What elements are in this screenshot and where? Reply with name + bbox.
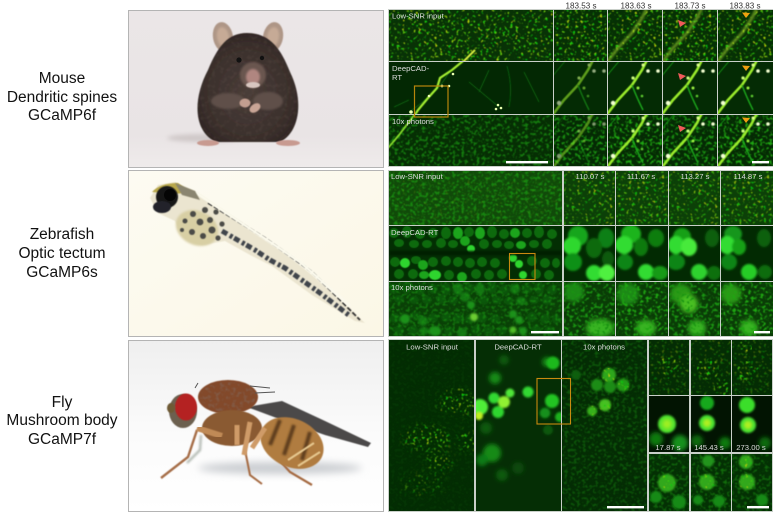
panel labels: mouse: DeepCAD-	[392, 64, 430, 73]
image: zebrafish 10x overview	[389, 282, 562, 336]
row label: zebrafish	[18, 226, 106, 281]
row label: fly	[6, 394, 118, 448]
panel labels: mouse: RT	[392, 73, 402, 82]
panel labels: fly	[406, 342, 625, 352]
arrowheads: red, spine	[678, 20, 686, 132]
panel group: mouse dendritic spine imaging	[388, 2, 773, 170]
timestamps: fly: 273.00 s	[736, 443, 766, 452]
orange selection box	[537, 378, 570, 424]
row label: mouse	[7, 70, 117, 124]
timestamps: mouse: 183.83 s	[729, 2, 761, 10]
panel labels: zebrafish: Low-SNR input	[391, 172, 444, 181]
arrowheads: orange, spine	[742, 12, 750, 123]
row label: mouse: Dendritic spines	[7, 89, 117, 106]
scale bars: mouse	[506, 161, 769, 163]
panel labels: fly: 10x photons	[583, 342, 625, 352]
row label: zebrafish: Optic tectum	[18, 245, 106, 262]
panel labels: fly: DeepCAD-RT	[494, 342, 542, 352]
panel labels: mouse: Low-SNR input	[392, 12, 445, 20]
timestamps: mouse: 183.63 s	[620, 2, 652, 10]
small panels: low-SNR	[649, 340, 772, 395]
photo: zebrafish	[128, 170, 384, 336]
image: mouse low-SNR overview	[389, 10, 553, 61]
timestamps: mouse: 183.53 s	[565, 2, 597, 10]
small panels: DeepCAD	[649, 396, 772, 452]
small panels: 10x photons time series	[564, 282, 773, 337]
timestamps: fly: 145.43 s	[694, 443, 724, 452]
timestamps: zebrafish	[576, 172, 763, 181]
row label: fly: GCaMP7f	[28, 431, 97, 448]
timestamps: zebrafish: 110.07 s	[576, 172, 605, 181]
timestamps: mouse: 183.73 s	[674, 2, 706, 10]
panel labels: mouse	[392, 12, 445, 126]
image: zebrafish DeepCAD overview	[389, 226, 562, 281]
row label: fly: Mushroom body	[6, 412, 118, 429]
row label: zebrafish: GCaMP6s	[26, 264, 98, 281]
panel labels: fly: Low-SNR input	[406, 342, 459, 352]
orange selection box	[414, 86, 448, 117]
image: mouse DeepCAD overview	[389, 62, 553, 114]
panel labels: zebrafish: DeepCAD-RT	[391, 228, 439, 237]
timestamps: zebrafish: 113.27 s	[681, 172, 710, 181]
row label: fly: Fly	[52, 394, 73, 411]
image: mouse 10x overview	[389, 115, 553, 166]
timestamps: fly	[655, 443, 766, 452]
scale bars: fly	[607, 506, 769, 508]
timestamps: fly: 17.87 s	[655, 443, 681, 452]
image: fly DeepCAD overview	[476, 340, 561, 511]
row label: mouse: GCaMP6f	[28, 107, 97, 124]
panel labels: mouse: 10x photons	[392, 117, 434, 126]
panel labels: zebrafish	[391, 172, 444, 292]
panel group: zebrafish optic tectum imaging	[388, 170, 773, 338]
small panels: low-SNR time series	[564, 171, 773, 225]
small panels: DeepCAD time series	[563, 225, 773, 281]
photo: mouse	[128, 10, 384, 168]
image: fly 10x overview	[562, 340, 647, 511]
timestamps: mouse	[565, 2, 761, 10]
panel labels: zebrafish: 10x photons	[391, 283, 433, 292]
image: fly low-SNR overview	[389, 340, 474, 511]
panel group: fly mushroom body imaging	[388, 339, 773, 512]
photo: fly	[128, 340, 384, 512]
small panels: 10x photons	[649, 454, 772, 511]
small panels: 10x photons time series	[551, 113, 773, 170]
small panels: DeepCAD time series	[551, 60, 773, 117]
timestamps: zebrafish: 114.87 s	[734, 172, 763, 181]
row label: mouse: Mouse	[39, 70, 85, 87]
image: zebrafish low-SNR overview	[389, 171, 562, 225]
scale bars: zebrafish	[531, 331, 770, 333]
row label: zebrafish: Zebrafish	[30, 226, 94, 243]
orange selection box	[510, 254, 535, 280]
timestamps: zebrafish: 111.67 s	[627, 172, 655, 181]
small panels: low-SNR time series	[554, 8, 773, 65]
